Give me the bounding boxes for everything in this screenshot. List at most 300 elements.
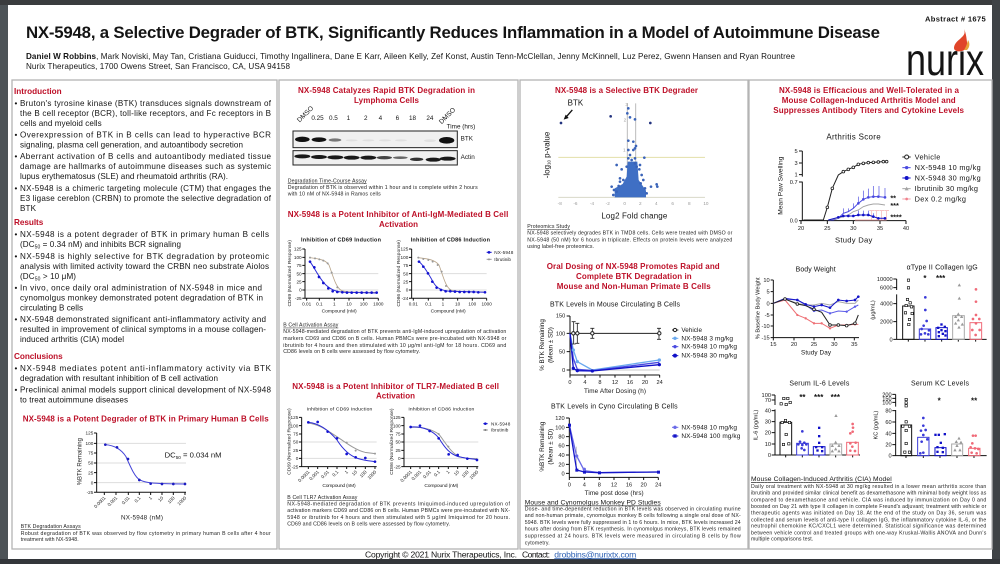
text: results bullets: • [14,284,18,292]
chart: mouse BTK levels: 12 [612,380,618,386]
chart: CD69 and CD86 TLR7: 75 [293,432,299,437]
chart: cyno BTK levels: %BTK Remaining [539,421,546,472]
chart: CD69 and CD86 TLR7: 0.01 [320,469,330,479]
chart: mouse BTK levels: (Mean ± SD) [548,327,555,363]
chart: CD69 and CD86 TLR7: 50 [293,440,299,445]
chart: cyno BTK levels: 20 [641,482,647,488]
chart: BTK dose response: DC [165,450,176,459]
text: B cell activation assay: CD86 levels on B cells were assessed by flow cytometry. [283,349,420,355]
chart: serum IL-6: ** [799,393,806,402]
chart: collagen IgG: 10000 [877,277,893,283]
chart: collagen IgG: αType II Collagen IgG [907,264,978,271]
text: results bullets: In vivo, once daily oral administration of NX-5948 in mice and [20,284,262,292]
chart: cyno BTK levels: 0 [568,482,571,488]
text: CIA model description [751,476,987,543]
copyright footer [365,549,636,559]
chart: CD69 and CD86 anti-IgM: 50 [296,271,302,276]
volcano plot: Log2 Fold change [601,211,668,220]
chart: CD69 and CD86 anti-IgM: 1000 [373,301,384,306]
volcano plot: 2 [639,201,642,206]
chart: cyno BTK levels: 80 [558,435,565,441]
text: conclusions bullets: NX-5948 mediates potent anti-inflammatory activity via BTK [20,364,272,373]
chart: mouse BTK levels: 50 [559,350,565,356]
volcano plot: -log [542,165,551,178]
heading: efficacy: NX-5948 is Efficacious and Well-Tolerated in a [779,86,960,95]
chart: serum KC: * [938,396,942,405]
chart: BTK dose response: 50 [88,461,94,466]
chart: CD69 and CD86 anti-IgM: 0 [406,288,409,293]
text: time-course assay [288,178,478,198]
volcano plot: -8 [558,201,562,206]
chart: serum KC: ** [971,396,978,405]
chart: CD69 and CD86 TLR7: 100 [359,469,368,479]
chart: serum KC: KC (pg/mL) [873,410,879,439]
chart: arthritis score: 20 [798,226,804,232]
text: B cell activation assay: NX-5948-mediated degradation of BTK prevents anti-IgM-induced upregulation of activation [283,329,506,335]
chart: CD69 and CD86 TLR7: Ibrutinib [491,428,509,433]
copyright footer: Copyright © 2021 Nurix Therapeutics, Inc. [365,549,517,559]
chart: CD69 and CD86 anti-IgM: 1000 [481,301,492,306]
chart: collagen IgG: (μg/mL) [870,300,876,320]
chart: BTK dose response: NX-5948 (nM) [121,515,163,522]
chart: body weight: 30 [831,342,837,348]
text: time-course assay: Degradation Time-Course Assay [288,178,367,184]
chart: mouse BTK levels: 8 [598,380,602,386]
chart: mouse BTK levels: 16 [627,380,633,386]
chart: collagen IgG: 4000 [880,302,893,308]
chart: BTK dose response: 125 [86,431,94,436]
chart: CD69 and CD86 TLR7: 0 [296,456,299,461]
chart: BTK dose response: 1000 [176,495,188,506]
chart: serum IL-6: 70 [765,398,771,404]
panel: text summary [12,80,277,549]
text: results bullets: > 10 μM) [41,272,76,281]
chart: BTK dose response: = 0.034 nM [181,450,222,459]
chart: arthritis score: 0.0 [790,219,798,225]
text: conclusions bullets: • [14,364,18,373]
heading: rapid degradation [298,86,475,105]
chart: CD69 and CD86 anti-IgM [287,237,514,314]
chart: CD69 and CD86 anti-IgM: 50 [403,271,409,276]
chart: arthritis score: ** [890,193,896,202]
text: conclusions bullets: degradation with resultant inhibition of B cell activation [20,374,218,383]
panel: degradation and inhibition [279,80,518,549]
chart: BTK dose response: 1 [148,495,153,501]
heading: primary B cells: NX-5948 is a Potent Degrader of BTK in Primary Human B Cells [23,414,269,424]
chart: body weight: 5 [767,290,770,296]
heading: TLR7: NX-5948 is a Potent Inhibitor of TLR7-Mediated B cell [292,382,499,391]
chart: serum IL-6 [754,380,860,459]
text: introduction bullets [14,99,272,213]
chart: CD69 and CD86 anti-IgM: 25 [403,279,409,284]
chart: CD69 and CD86 anti-IgM: 75 [403,263,409,268]
heading: rapid degradation: Lymphoma Cells [354,96,420,105]
chart: cyno BTK levels: 0 [562,471,565,477]
text: results bullets: • [14,230,18,239]
western blot: 0.25 [311,115,324,122]
title: NX-5948, a Selective Degrader of BTK, Significantly Reduces Inflammation in a Model of Autoimmune Disease [26,23,880,42]
chart: serum KC: 40 [885,431,892,437]
chart: CD69 and CD86 anti-IgM: 0.1 [425,301,432,306]
volcano plot: 2 [624,117,627,122]
text: CIA model description: multiple comparisons test. [751,537,813,543]
text: mouse and cyno PD studies [525,500,741,546]
chart: collagen IgG: 0 [889,337,893,343]
abstract number: Abstract # 1675 [925,14,986,24]
chart: cyno BTK levels: 20 [558,462,565,468]
text: TLR7 activation assay: B Cell TLR7 Activation Assay [287,495,358,501]
heading: anti-IgM [288,210,508,229]
volcano plot: -2 [606,201,610,206]
chart: CD69 and CD86 anti-IgM: 100 [360,301,368,306]
chart: body weight: -5 [765,313,770,319]
western blot: 6 [396,115,400,122]
chart: CD69 and CD86 anti-IgM: -24 [402,296,409,301]
text: CIA model description: collected and serum levels of anti-type II collagen IgG, the inflammatory cytokine IL-6, or the [751,517,986,523]
copyright footer: Contact: [522,549,550,559]
chart: serum IL-6: 30 [765,420,771,426]
western blot: 0.5 [329,115,338,122]
chart: serum IL-6: IL-6 (pg/mL) [754,409,760,440]
chart: serum IL-6: 100 [762,393,771,399]
chart: CD69 and CD86 TLR7: 125 [291,415,299,420]
chart: BTK dose response: 0.0001 [93,495,107,509]
text: BTK degradation assays: BTK Degradation Assays [21,524,81,530]
chart: CD69 and CD86 anti-IgM: CD86 (Normalized Response) [396,240,402,307]
chart: CD69 and CD86 TLR7: -25 [394,464,401,469]
chart: mouse BTK levels: Vehicle [681,327,702,334]
chart: cyno BTK levels: 12 [611,482,617,488]
chart: CD69 and CD86 TLR7: 1000 [468,469,480,480]
heading: TLR7: Activation [376,392,415,401]
chart: CD69 and CD86 anti-IgM: NX-5948 [494,250,514,255]
chart: mouse BTK levels: Time After Dosing (h) [584,388,646,395]
chart: arthritis score: 25 [824,226,830,232]
heading: introduction: Introduction [14,87,62,96]
chart: BTK dose response: 25 [88,470,94,475]
chart: cyno BTK levels: 120 [555,416,565,422]
text: CIA model description: compared to dexamethasone and vehicle. CIA was induced by immunization on Day 0 and [751,497,986,503]
chart: CD69 and CD86 TLR7: Inhibition of CD86 Induction [408,407,475,413]
chart: CD69 and CD86 anti-IgM: Compound (nM) [431,308,466,314]
chart: body weight: Body Weight [796,266,836,273]
chart: body weight: -15 [761,336,770,342]
western blot: 24 [426,115,434,122]
chart: CD69 and CD86 TLR7: CD69 (Normalized Response) [287,408,293,475]
chart: mouse BTK levels: 20 [642,380,648,386]
text: results bullets: = 0.34 nM) and inhibits BCR signaling [40,240,181,249]
chart: BTK dose response: 0 [91,480,94,485]
heading: conclusions: Conclusions [14,352,63,361]
volcano plot: 4 [655,201,658,206]
chart: collagen IgG: *** [936,274,946,283]
text: proteomics study [527,224,733,250]
chart: CD69 and CD86 TLR7: Compound (nM) [322,483,356,489]
chart: CD69 and CD86 TLR7: 100 [461,469,470,479]
chart: arthritis score: **** [890,212,902,221]
chart: mouse BTK levels: 0 [562,368,565,374]
text: proteomics study: NX-5948 (50 nM) for 6 hours in triplicate. Effects on protein levels were analyzed [527,238,732,244]
chart: cyno BTK levels: 100 [555,425,565,431]
text: results bullets: cynomolgus monkey demonstrated potent degradation of BTK in [20,294,263,302]
text: CIA model description: boosted on Day 21 with type II collagen in complete Freund's adjuvant; treatment with vehicle or [751,504,987,510]
chart: CD69 and CD86 TLR7: 100 [393,423,401,428]
text: mouse and cyno PD studies: Mouse and Cynomolgus Monkey PD Studies [525,500,661,506]
chart: arthritis score: 5 [795,149,798,155]
text: mouse and cyno PD studies: cytometry. [525,540,550,546]
text: results bullets: 50 [35,244,40,250]
chart: CD69 and CD86 TLR7: Inhibition of CD69 Induction [307,407,373,413]
chart: CD69 and CD86 anti-IgM: Inhibition of CD86 Induction [411,237,491,243]
chart: cyno BTK levels: Time post dose (hrs) [585,490,644,497]
chart: CD69 and CD86 anti-IgM: 75 [296,263,302,268]
chart: CD69 and CD86 TLR7 [287,407,511,489]
text: results bullets: (DC [20,272,35,281]
chart: CD69 and CD86 anti-IgM: 100 [401,255,409,260]
heading: rapid degradation: NX-5948 Catalyzes Rapid BTK Degradation in [298,86,475,95]
text: TLR7 activation assay: NX-5948-mediated degradation of BTK prevents Imiquimod-induced upregulation of [287,502,511,508]
chart: CD69 and CD86 anti-IgM: 10 [455,301,461,306]
chart: body weight [755,266,860,356]
chart: CD69 and CD86 TLR7: 100 [291,423,299,428]
text: results bullets: resulted in improvement of clinical symptoms in a mouse collagen- [20,325,266,334]
chart: CD69 and CD86 TLR7: 1000 [367,469,378,480]
text: B cell activation assay: ibrutinib for 4 hours and then stimulated with 10 μg/ml anti-IgM for 18 hours. CD69 and [283,343,506,349]
text: conclusions bullets [14,364,272,404]
text: conclusions bullets: to treat autoimmune diseases [20,396,128,404]
volcano plot: -4 [590,201,595,206]
volcano plot: p-value [542,131,551,160]
chart: BTK dose response: 50 [176,455,181,460]
heading: efficacy: Suppresses Antibody Titers and Cytokine Levels [773,106,965,115]
chart: mouse BTK levels [539,301,737,395]
chart: CD69 and CD86 TLR7: 0.1 [433,469,441,478]
panel: selectivity and PD [520,80,748,549]
text: introduction bullets: NX-5948 is a chimeric targeting molecule (CTM) that engages the [20,184,271,193]
chart: serum IL-6: *** [831,393,841,402]
chart: arthritis score: Mean Paw Swelling [777,156,784,215]
text: results bullets: • [14,252,18,261]
chart: CD69 and CD86 anti-IgM: 100 [468,301,477,306]
chart: CD69 and CD86 anti-IgM: Compound (nM) [322,308,357,314]
chart: serum IL-6: 10 [765,442,771,448]
chart: cyno BTK levels: (Mean ± SD) [548,429,555,465]
chart: CD69 and CD86 anti-IgM: 0.01 [409,301,418,306]
chart: body weight: 35 [851,342,857,348]
affiliation: Nurix Therapeutics, 1700 Owens Street, San Francisco, CA, USA 94158 [26,62,290,71]
chart: serum KC: 150 [882,396,892,402]
chart: cyno BTK levels: 16 [626,482,632,488]
chart: mouse BTK levels: % BTK Remaining [539,319,546,371]
western blot: Actin [461,154,475,161]
chart: CD69 and CD86 TLR7: 1 [445,469,451,475]
text: TLR7 activation assay: activation markers CD69 and CD86 on B cells. Human PBMCs were pre-incubated with NX- [287,508,510,514]
text: CIA model description: between vehicle control and treated groups with one-way Kruskal-Wallis ANOVA and Dunn's [751,530,987,536]
chart: CD69 and CD86 anti-IgM: 1 [333,301,336,306]
chart: mouse BTK levels: 0 [568,380,572,386]
chart: body weight: 0 [767,301,770,307]
chart: serum KC: 200 [882,392,892,398]
chart: CD69 and CD86 TLR7: 25 [395,448,401,453]
authors: Daniel W Robbins, Mark Noviski, May Tan, Cristiana Guiducci, Timothy Ingallinera, Dane E Karr, Aileen Kelly, Zef Konst, Austin Tenn-McClellan, Jenny McKinnell, Luz Perez, Gwenn Hansen and Ryan Rountree [26,52,795,61]
chart: CD69 and CD86 TLR7: 50 [395,440,401,445]
text: BTK degradation assays: Robust degradation of BTK was observed by flow cytometry in primary human B cells after 4 hour [21,531,271,537]
western blot [293,105,475,165]
western blot: DMSO [438,107,457,126]
text: CIA model description: Daily oral treatment with NX-5948 at 30 mg/kg resulted in a lower mean arthritis score than [751,484,986,490]
chart: CD69 and CD86 TLR7: 125 [393,415,401,420]
text: results bullets: NX-5948 is highly selective for BTK degradation by proteomic [20,252,269,261]
text: introduction bullets: E3 ligase cereblon (CRBN) to promote the selective degradation of [20,194,272,203]
volcano plot: 8 [688,201,691,206]
chart: CD69 and CD86 anti-IgM: 0 [299,288,302,293]
chart: serum KC: 100 [882,400,892,406]
western blot: 1 [347,115,351,122]
chart: CD69 and CD86 anti-IgM: -25 [295,296,302,301]
chart: CD69 and CD86 TLR7: 1 [344,469,349,475]
text: introduction bullets: Overexpression of BTK in B cells can lead to hyperactive BCR [20,130,271,140]
text: introduction bullets: lupus erythematosus (SLE) and rheumatoid arthritis (RA). [20,172,228,181]
chart: arthritis score: NX-5948 30 mg/kg [915,173,981,182]
text: TLR7 activation assay [287,495,511,528]
text: results bullets: NX-5948 is a potent degrader of BTK in primary human B cells [20,230,269,239]
text: introduction bullets: cells and myeloid cells [20,119,102,128]
chart: serum KC: 80 [885,409,892,415]
text: mouse and cyno PD studies: suppressed at 24 hours. BTK levels were measured in circulating B cells by flow [525,534,741,540]
chart: body weight: 10 [763,278,770,284]
chart: serum KC: 20 [885,443,892,449]
volcano plot: 6 [671,201,674,206]
western blot: DMSO [296,105,315,124]
volcano plot: 10 [703,201,709,206]
volcano plot: 10 [546,160,551,165]
nurix logo: nurix [906,34,984,85]
text: mouse and cyno PD studies: and non-human primate, cynomolgus monkey B cells following a single oral dose of NX- [525,513,741,519]
heading: oral dosing: Oral Dosing of NX-5948 Promotes Rapid and [547,262,720,271]
western blot: Time (hrs) [447,123,475,130]
chart: CD69 and CD86 TLR7: 0.1 [331,469,340,478]
chart: serum KC [873,380,987,460]
chart: serum KC: Serum KC Levels [911,380,969,387]
chart: CD69 and CD86 anti-IgM: 0.1 [316,301,323,306]
text: mouse and cyno PD studies: hours after dosing from BTK resynthesis. In cynomolgus monkeys, BTK levels remained [525,527,741,533]
chart: CD69 and CD86 anti-IgM: 25 [296,279,302,284]
text: results bullets: • [14,315,18,324]
text: conclusions bullets: Preclinical animal models support clinical development of NX-5948 [20,386,271,394]
heading: oral dosing: Mouse and Non-Human Primate B Cells [557,282,711,291]
chart: BTK dose response: 0.01 [121,495,131,505]
chart: arthritis score: 1 [795,173,798,179]
chart: CD69 and CD86 anti-IgM: CD69 (Normalized Response) [287,240,293,307]
chart: CD69 and CD86 TLR7: -25 [292,464,299,469]
text: CIA model description: therapeutic agents was initiated on Day 18. At the end of the study on Day 36, serum was [751,511,987,517]
chart: mouse BTK levels: NX-5948 30 mg/kg [681,353,737,360]
chart: CD69 and CD86 TLR7: 0.0001 [297,469,311,483]
chart: arthritis score [777,133,981,245]
western blot: BTK [461,135,474,142]
chart: BTK dose response: 75 [88,451,94,456]
text: BTK degradation assays [21,524,271,543]
western blot: 18 [409,115,417,122]
chart: arthritis score: Study Day [835,236,872,245]
western blot: 2 [364,115,368,122]
volcano plot: 1 [623,147,626,152]
chart: serum KC: 60 [885,420,892,426]
text: introduction bullets: Aberrant activation of B cells and autoantibody mediated tissue [20,152,271,161]
chart: cyno BTK levels: 24 [655,482,661,488]
chart: BTK dose response: 0.1 [134,495,142,504]
western blot: 4 [379,115,383,122]
chart: CD69 and CD86 anti-IgM: 10 [346,301,352,306]
volcano plot: 3 [625,102,628,107]
chart: arthritis score: Ibrutinib 30 mg/kg [915,184,978,193]
chart: arthritis score: 40 [903,226,909,232]
chart: collagen IgG: 6000 [880,286,893,292]
chart: CD69 and CD86 anti-IgM: 1 [442,301,445,306]
chart: BTK dose response: -25 [87,490,94,495]
chart: cyno BTK levels: NX-5948 10 mg/kg [681,424,737,431]
heading: TLR7 [292,382,499,401]
text: BTK degradation assays: treatment with NX-5948. [21,537,79,543]
chart: BTK dose response: %BTK Remaining [78,438,84,485]
chart: BTK dose response: 100 [167,495,176,505]
chart: BTK dose response: 100 [86,441,94,446]
chart: CD69 and CD86 TLR7: 10 [351,469,358,477]
heading: anti-IgM: NX-5948 is a Potent Inhibitor of Anti-IgM-Mediated B Cell [288,210,508,219]
chart: BTK dose response: 10 [157,495,165,503]
chart: BTK dose response [78,431,222,522]
chart: CD69 and CD86 anti-IgM: 125 [401,247,409,252]
chart: CD69 and CD86 TLR7: 0.001 [308,469,320,481]
chart: mouse BTK levels: NX-5948 3 mg/kg [681,335,733,342]
heading: results: Results [14,218,44,227]
chart: CD69 and CD86 TLR7: 0.001 [411,469,423,481]
chart: cyno BTK levels: 60 [558,444,565,450]
chart: CD69 and CD86 anti-IgM: 100 [294,255,302,260]
chart: CD69 and CD86 TLR7: 25 [293,448,299,453]
chart: serum IL-6: 20 [765,431,771,437]
heading: oral dosing [547,262,720,291]
text: CIA model description: neutrophil chemokine KC/CXCL1 were determined. Statistical significance was determined [751,524,986,530]
chart: CD69 and CD86 anti-IgM: Ibrutinib [494,257,511,262]
chart: body weight: 20 [791,342,797,348]
chart: arthritis score: Vehicle [915,152,940,161]
chart: body weight: Study Day [801,349,832,356]
chart: arthritis score: NX-5948 10 mg/kg [915,163,981,172]
chart: mouse BTK levels: NX-5948 10 mg/kg [681,344,737,351]
text: results bullets [14,230,269,344]
text: B cell activation assay [283,323,507,355]
chart: arthritis score: 35 [877,226,883,232]
chart: arthritis score: 0.7 [790,180,798,186]
heading: anti-IgM: Activation [379,220,418,229]
chart: cyno BTK levels: BTK Levels in Cyno Circulating B Cells [551,403,678,410]
chart: CD69 and CD86 TLR7: 0.0001 [399,469,413,483]
text: introduction bullets: signaling, plasma cell generation, and autoantibody secretion [20,140,243,150]
text: CIA model description: Mouse Collagen-Induced Arthritis (CIA) Model [751,476,892,483]
text: introduction bullets: • [14,99,18,108]
chart: mouse BTK levels: 100 [556,331,565,337]
text: proteomics study: using label-free proteomics. [527,244,594,250]
chart: CD69 and CD86 TLR7: 75 [395,432,401,437]
chart: serum IL-6: Serum IL-6 Levels [789,380,850,387]
volcano plot [542,98,709,220]
text: CIA model description: ibrutinib and provided similar clinical benefit as dexamethasone with minimal body weight loss as [751,491,987,497]
text: TLR7 activation assay: 5948 or ibrutinib for 4 hours and then stimulated with 5 μg/ml Imiquimod for 20 hours. [287,515,510,521]
chart: mouse BTK levels: BTK Levels in Mouse Circulating B Cells [550,301,680,308]
volcano plot: BTK [568,98,584,107]
chart: CD69 and CD86 TLR7: 0 [398,456,401,461]
